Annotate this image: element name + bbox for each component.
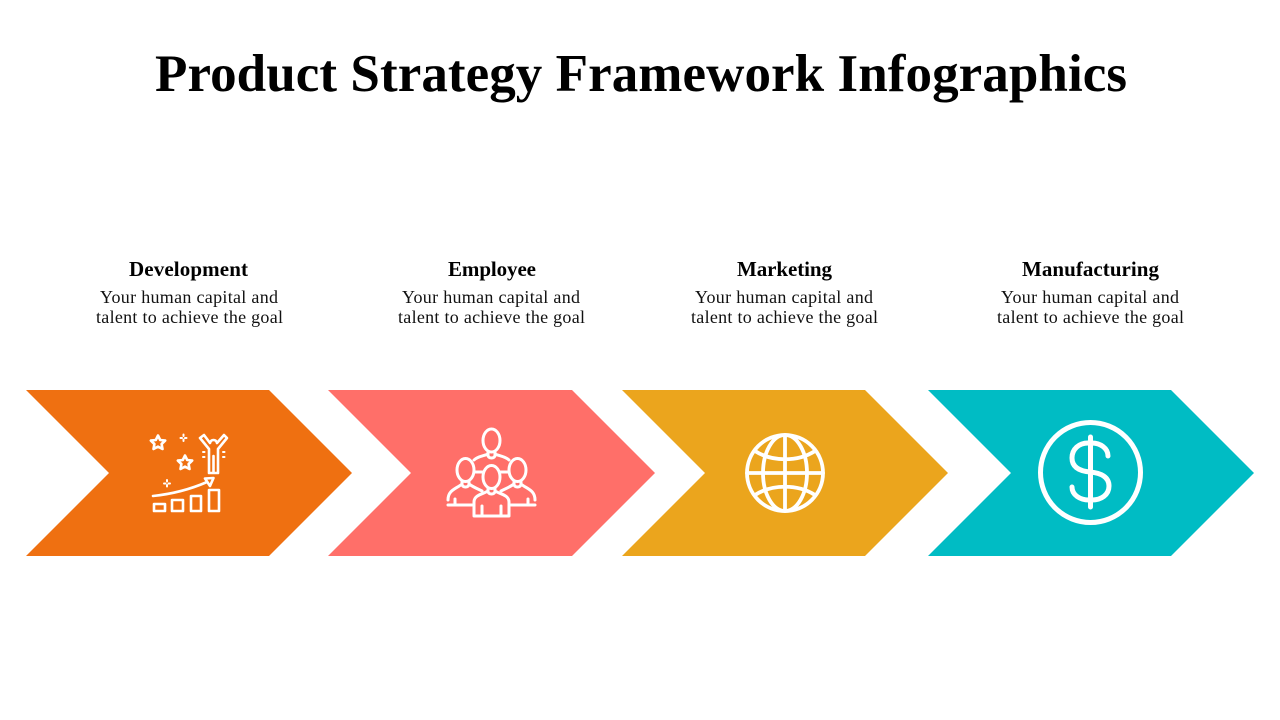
icon: growth chart with celebrating person — [151, 434, 227, 511]
arrow: manufacturing chevron — [928, 390, 1254, 556]
heading: marketing: Marketing — [737, 257, 832, 281]
panel: manufacturing text — [997, 257, 1184, 327]
arrow: employee chevron — [328, 390, 655, 556]
text block: development — [96, 287, 283, 327]
heading: manufacturing: Manufacturing — [1022, 257, 1160, 281]
heading: development: Development — [129, 257, 248, 281]
text block: employee: Your human capital and — [402, 287, 580, 307]
text block: employee — [398, 287, 585, 327]
text block: manufacturing — [997, 287, 1184, 327]
arrow: development chevron — [26, 390, 352, 556]
title: Product Strategy Framework Infographics — [155, 45, 1127, 103]
text block: employee: talent to achieve the goal — [398, 307, 585, 327]
arrow: marketing chevron — [622, 390, 948, 556]
heading: employee: Employee — [448, 257, 536, 281]
text block: marketing: talent to achieve the goal — [691, 307, 878, 327]
text block: manufacturing: Your human capital and — [1001, 287, 1179, 307]
text block: development: Your human capital and — [100, 287, 278, 307]
icon: dollar coin — [1040, 422, 1140, 522]
text block: marketing: Your human capital and — [695, 287, 873, 307]
icon: globe — [747, 435, 823, 511]
icon: team of people — [448, 429, 535, 516]
panel: employee text — [398, 257, 585, 327]
panel: development text — [96, 257, 283, 327]
text block: marketing — [691, 287, 878, 327]
panel: marketing text — [691, 257, 878, 327]
text block: manufacturing: talent to achieve the goal — [997, 307, 1184, 327]
text block: development: talent to achieve the goal — [96, 307, 283, 327]
